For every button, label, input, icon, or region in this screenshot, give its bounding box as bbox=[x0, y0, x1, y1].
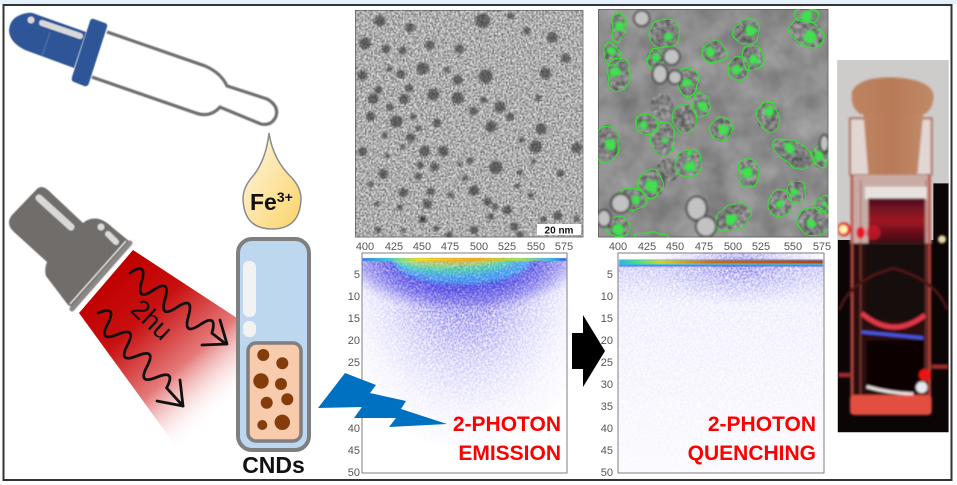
depth scale: 15 bbox=[601, 313, 613, 325]
label: 2hu: 2hu bbox=[125, 293, 178, 346]
wavelength labels: 425 bbox=[638, 241, 656, 253]
icon: CND vial bbox=[238, 239, 309, 450]
depth scale: 45 bbox=[601, 445, 613, 457]
scattered emission haze bbox=[362, 257, 568, 432]
arrow: blue lightning bbox=[318, 373, 447, 427]
depth labels: 45 bbox=[348, 445, 360, 457]
quenching bright band bbox=[619, 260, 823, 266]
label: 2-photon quenching: 2-PHOTON bbox=[708, 413, 816, 436]
axis labels: 500 bbox=[470, 241, 488, 253]
depth scale: 5 bbox=[607, 269, 613, 281]
image: TEM micrograph bbox=[355, 10, 583, 239]
depth labels bbox=[348, 269, 360, 479]
depth labels: 25 bbox=[348, 357, 360, 369]
emission hot zone bbox=[362, 258, 567, 312]
depth scale bbox=[601, 269, 613, 479]
axis labels: 475 bbox=[441, 241, 459, 253]
photo: red-glowing cuvette bbox=[837, 60, 949, 432]
depth labels: 15 bbox=[348, 313, 360, 325]
label: 2-photon emission: 2-PHOTON bbox=[453, 413, 561, 436]
green nuclei bbox=[605, 11, 827, 235]
wavelength labels: 550 bbox=[784, 241, 802, 253]
wavelength labels: 575 bbox=[813, 241, 831, 253]
icon: flashlight bbox=[9, 187, 130, 309]
rounded unstained cells bbox=[597, 11, 829, 237]
depth labels: 5 bbox=[354, 269, 360, 281]
axis labels bbox=[356, 241, 573, 253]
depth scale: 20 bbox=[601, 335, 613, 347]
depth labels: 50 bbox=[348, 467, 360, 479]
icon: Fe3+ drop bbox=[243, 133, 301, 229]
depth labels: 20 bbox=[348, 335, 360, 347]
label: 2-photon quenching: QUENCHING bbox=[688, 442, 816, 465]
arrow: lower photon wave bbox=[98, 311, 183, 406]
heatmap: 2-photon quenching bbox=[601, 242, 831, 476]
arrow: black transition bbox=[572, 315, 605, 387]
depth scale: 25 bbox=[601, 357, 613, 369]
scale bar: 20 nm bbox=[537, 224, 581, 236]
arrow: upper photon wave bbox=[130, 269, 227, 345]
label: CNDs: CNDs bbox=[242, 452, 305, 478]
axis labels: 525 bbox=[498, 241, 516, 253]
icon: pipette bbox=[9, 13, 277, 124]
depth scale: 40 bbox=[601, 423, 613, 435]
depth scale: 10 bbox=[601, 291, 613, 303]
axis labels: 450 bbox=[413, 241, 431, 253]
axis labels: 400 bbox=[356, 241, 374, 253]
depth scale: 50 bbox=[601, 467, 613, 479]
heatmap: 2-photon emission bbox=[348, 242, 573, 476]
icon: Fe3+ drop: 3+ bbox=[277, 189, 293, 205]
depth labels: 40 bbox=[348, 423, 360, 435]
wavelength labels: 500 bbox=[724, 241, 742, 253]
quenched scatter bbox=[618, 252, 824, 466]
axis labels: 425 bbox=[385, 241, 403, 253]
icon: Fe3+ drop: Fe bbox=[250, 189, 277, 215]
wavelength labels: 525 bbox=[752, 241, 770, 253]
axis labels: 550 bbox=[527, 241, 545, 253]
label: 2-photon emission: EMISSION bbox=[458, 442, 561, 465]
axis labels: 575 bbox=[555, 241, 573, 253]
scale bar: 20 nm: 20 nm bbox=[545, 226, 574, 236]
wavelength labels: 400 bbox=[609, 241, 627, 253]
depth scale: 30 bbox=[601, 379, 613, 391]
cell bodies bbox=[596, 13, 832, 237]
wavelength labels: 475 bbox=[695, 241, 713, 253]
wavelength labels: 450 bbox=[666, 241, 684, 253]
depth labels: 10 bbox=[348, 291, 360, 303]
depth scale: 35 bbox=[601, 401, 613, 413]
green membrane outlines bbox=[596, 8, 832, 242]
image: cell fluorescence micrograph bbox=[596, 8, 832, 242]
wavelength labels bbox=[609, 241, 831, 253]
icon: light beam bbox=[79, 250, 240, 460]
